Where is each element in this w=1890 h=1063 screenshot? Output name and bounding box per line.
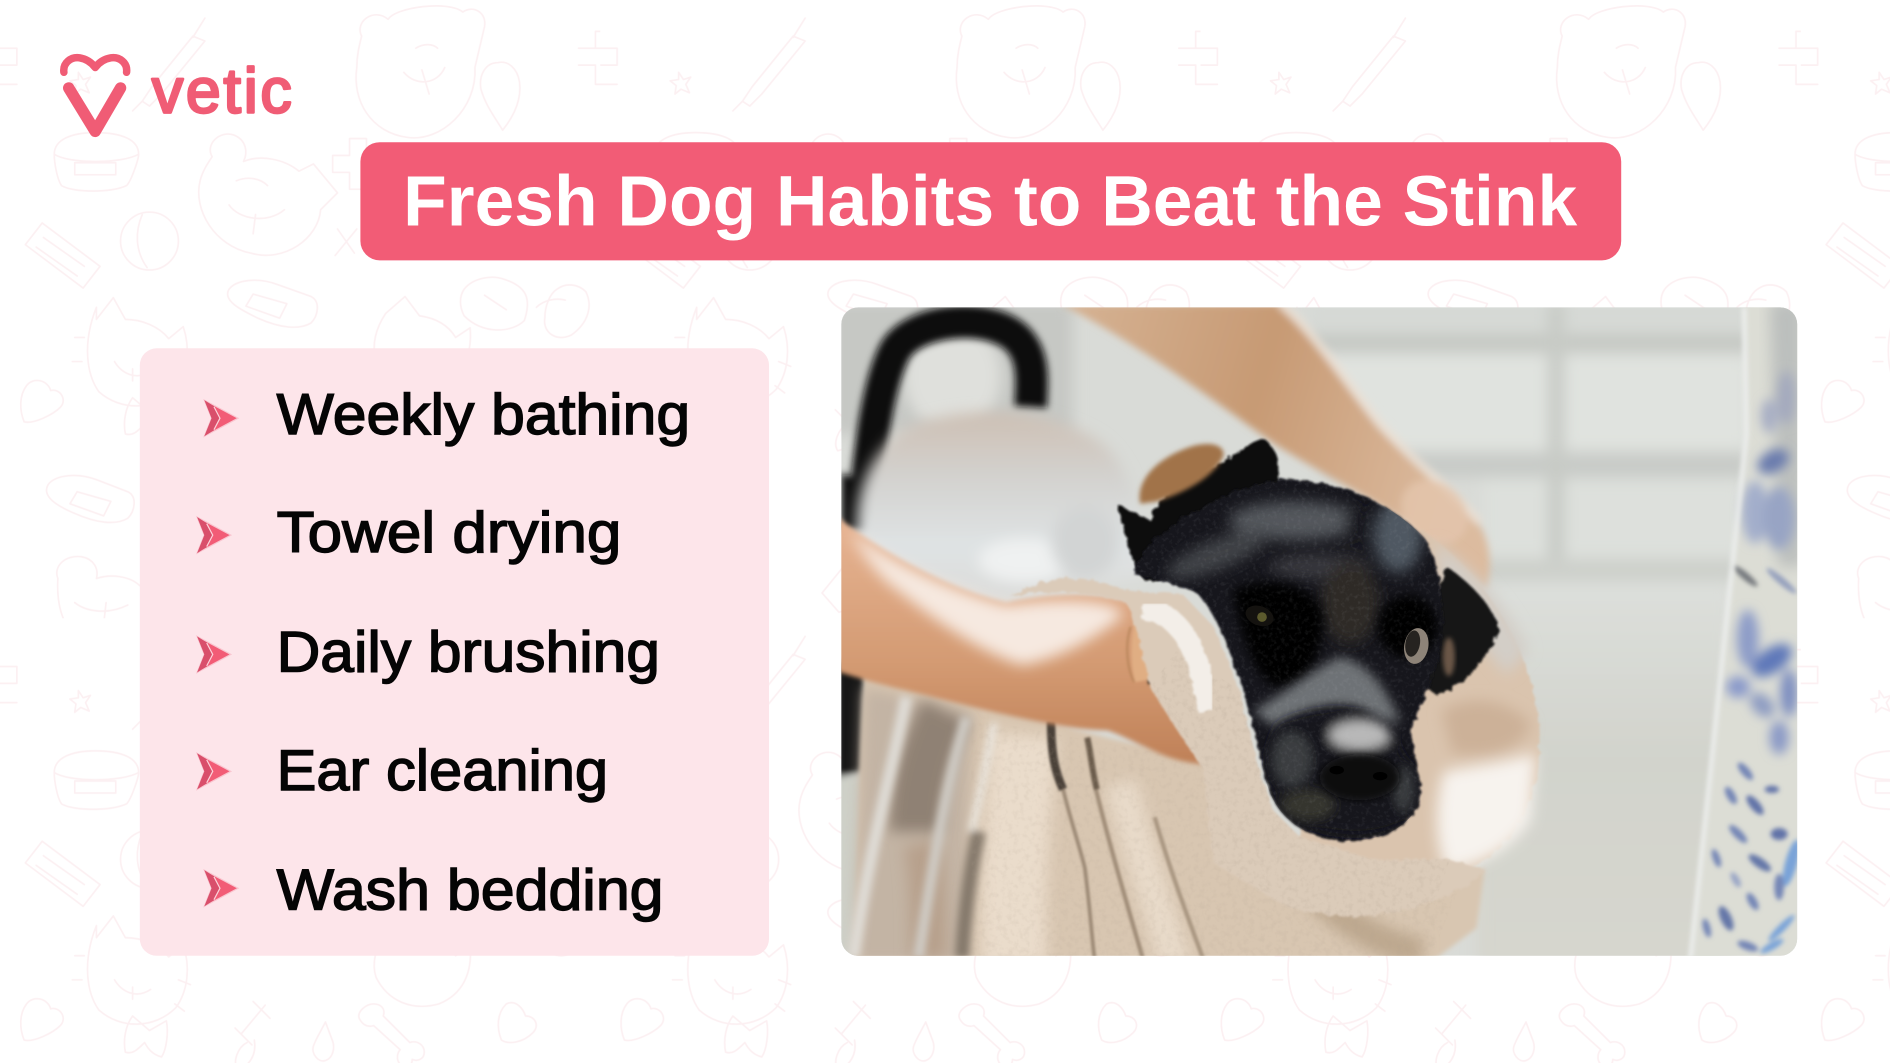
title text: Fresh Dog Habits to Beat the Stink (403, 162, 1578, 241)
snout (1268, 709, 1414, 835)
photo: wet dog body under towel (857, 412, 1148, 601)
photo: dog nose (1320, 754, 1399, 800)
logo: vetic (64, 57, 292, 131)
thumb (1126, 626, 1151, 686)
title banner (360, 142, 1621, 260)
photo: draped towel (853, 530, 1540, 964)
list item: towel drying: Towel drying (277, 501, 621, 565)
towel folds (853, 697, 1422, 964)
white towel edge (1143, 609, 1209, 711)
muzzle blaze (1254, 657, 1401, 729)
photo background: tiled wall (832, 301, 1797, 969)
list item: daily brushing: Daily brushing (277, 620, 660, 684)
panel: habits list (140, 348, 769, 956)
photo: dog eyes (1246, 606, 1429, 664)
head fur grain (1121, 476, 1446, 844)
list item: ear cleaning: Ear cleaning (277, 739, 608, 803)
photo: patterned shower curtain (1690, 301, 1803, 964)
photo: dog wrapped in towel (832, 301, 1803, 969)
photo: dog head (1133, 480, 1443, 841)
towel band grain (1162, 670, 1433, 913)
icon: heart-v mark (64, 58, 127, 131)
list item: wash bedding: Wash bedding (277, 858, 664, 922)
towel right side (1298, 530, 1540, 888)
photo: towel fold over face (1010, 579, 1485, 918)
photo: lower arm and hand (837, 516, 1203, 764)
photo: dog face fur highlights (1121, 476, 1446, 844)
logo wordmark: vetic (152, 57, 292, 127)
photo: upper arm (1061, 304, 1490, 591)
towel fur grain (988, 737, 1154, 919)
photo: black tail (837, 322, 1032, 964)
list item: weekly bathing: Weekly bathing (277, 383, 690, 447)
photo: dog ears (1116, 439, 1499, 695)
eye patches (1233, 582, 1438, 687)
curtain blue marks (1726, 371, 1798, 754)
